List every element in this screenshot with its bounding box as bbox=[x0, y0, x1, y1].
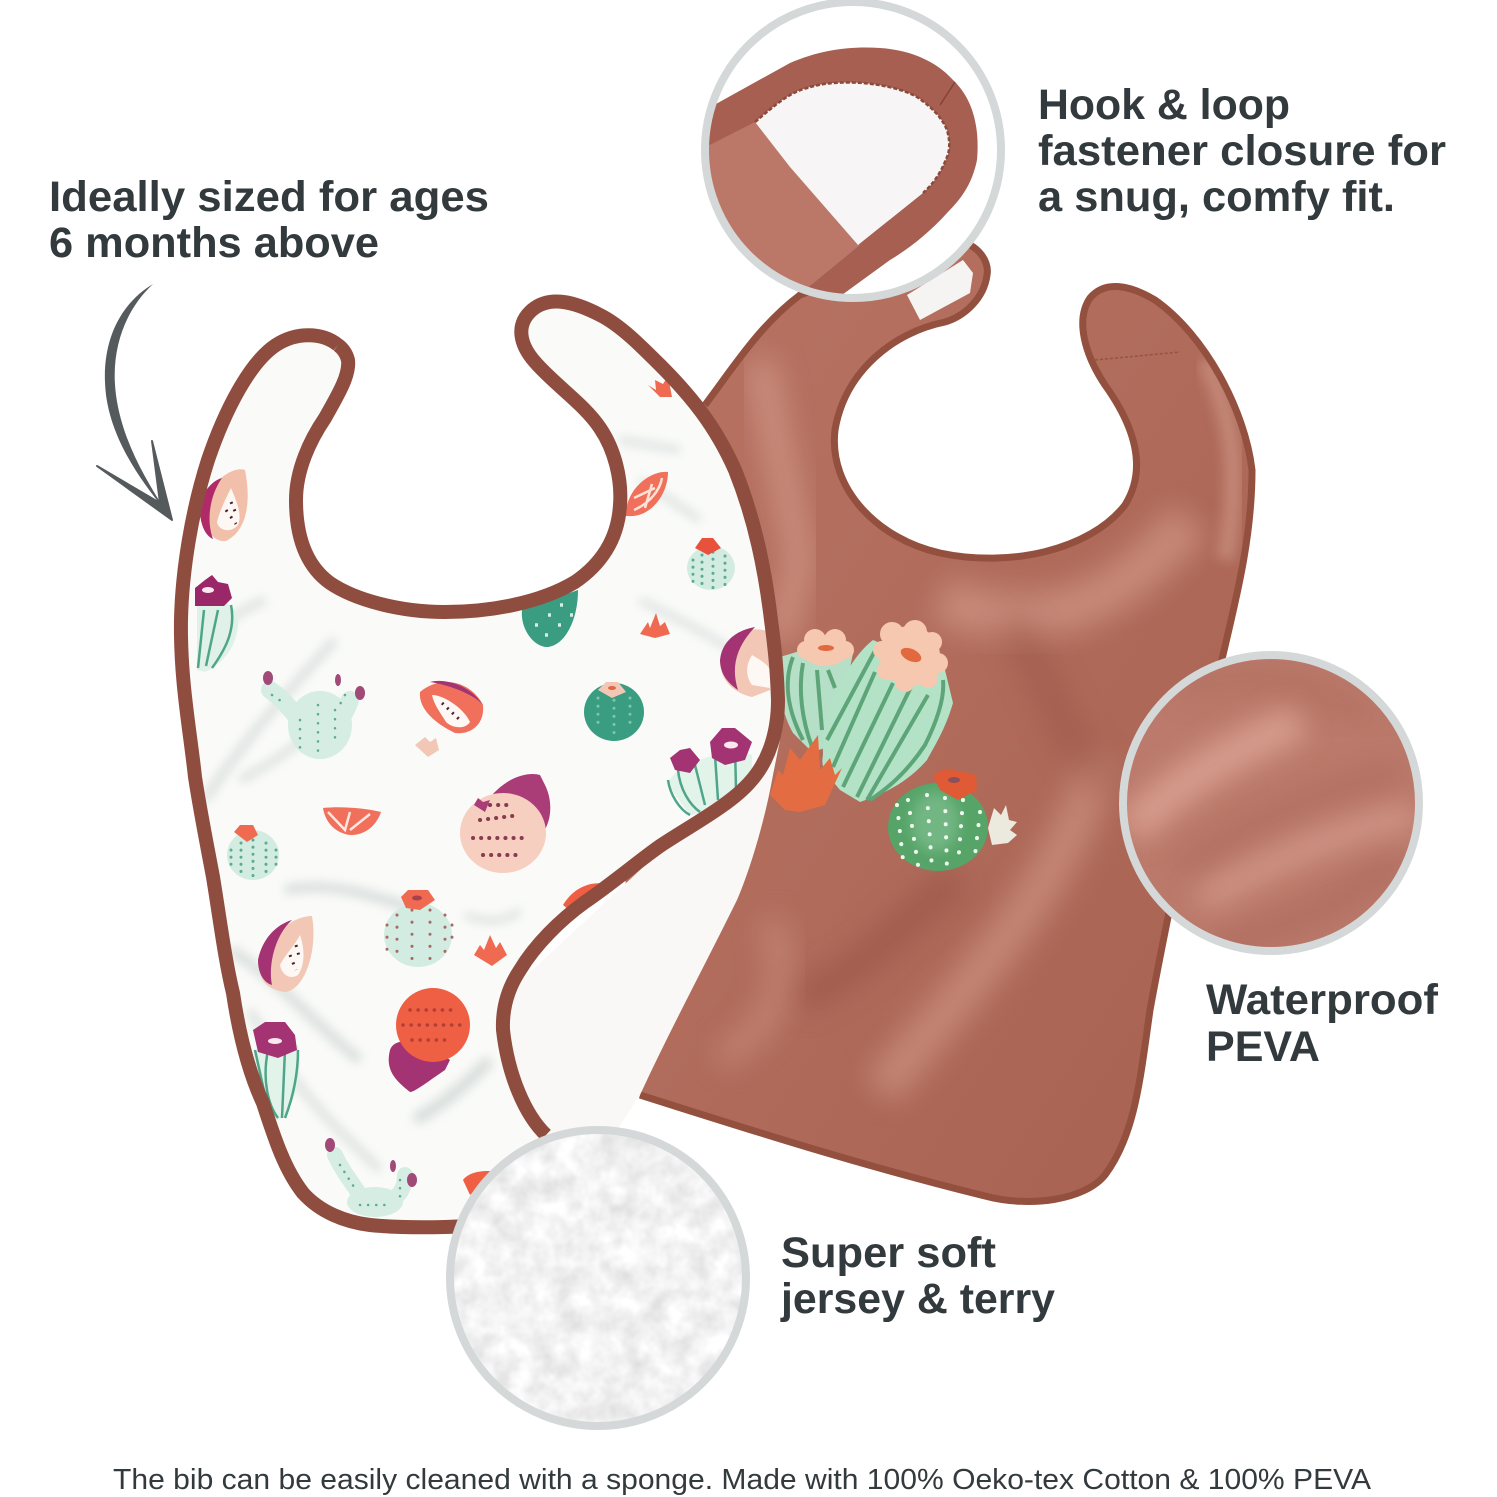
footer note: The bib can be easily cleaned with a sponge. Made with 100% Oeko-tex Cotton & 100% PEVA bbox=[113, 1464, 1372, 1496]
text: terry callout: Super soft bbox=[781, 1229, 996, 1277]
pattern: sprig bbox=[640, 613, 670, 638]
text: fastener callout: fastener closure for bbox=[1038, 127, 1446, 175]
pattern: papaya right edge bbox=[720, 627, 770, 697]
text: waterproof callout bbox=[1206, 976, 1439, 1071]
cactus illustration on right bib bbox=[770, 620, 1017, 871]
pattern: pale teal cactus bottom bbox=[325, 1138, 417, 1217]
bib binding bbox=[181, 302, 778, 1227]
pattern: striped cactus bottom left bbox=[253, 1022, 300, 1120]
terry towel flap bbox=[500, 740, 780, 1170]
arrow pointing to bib bbox=[97, 284, 172, 520]
text: age callout: 6 months above bbox=[49, 219, 379, 267]
text: fastener callout: a snug, comfy fit. bbox=[1038, 173, 1395, 221]
text: age callout bbox=[49, 173, 489, 267]
small flower bbox=[797, 629, 854, 666]
pattern: pale cactus lower left bbox=[227, 825, 279, 880]
white fastener tab on strap bbox=[907, 260, 973, 320]
text: fastener callout bbox=[1038, 81, 1446, 221]
velcro patch bbox=[755, 83, 949, 245]
text: waterproof callout: Waterproof bbox=[1206, 976, 1439, 1024]
text: fastener callout: Hook & loop bbox=[1038, 81, 1290, 129]
orange sprig bbox=[770, 735, 842, 812]
pattern: dotted cactus centre-left bbox=[263, 671, 365, 759]
pattern: flame sprig lower bbox=[474, 935, 507, 966]
pattern: green cactus below neck bbox=[522, 590, 578, 647]
text: terry callout bbox=[780, 1229, 1055, 1323]
pattern: grapefruit slice bbox=[626, 472, 668, 516]
pattern: green barrel cactus bbox=[584, 682, 644, 741]
callout circle: terry close-up bbox=[450, 1130, 746, 1426]
callout circle: hook and loop close-up bbox=[700, 2, 1001, 300]
strap body bbox=[700, 122, 860, 290]
strap binding bbox=[700, 48, 978, 300]
pattern: striped cactus right bbox=[668, 728, 752, 815]
left bib: printed cotton jersey side bbox=[170, 280, 790, 1240]
pattern: dotted pale cactus top right bbox=[687, 538, 735, 590]
big flower bbox=[873, 620, 948, 692]
right bib binding bbox=[640, 240, 1252, 1201]
pattern: fruit near bottom circle bbox=[463, 1171, 490, 1195]
pattern: papaya centre bbox=[420, 681, 483, 733]
callout circle: PEVA close-up bbox=[1123, 655, 1419, 951]
pattern: tiny flower bbox=[415, 737, 439, 757]
text: terry callout: jersey & terry bbox=[780, 1275, 1055, 1323]
pattern: fruit at fold bbox=[563, 883, 600, 908]
text: age callout: Ideally sized for ages bbox=[49, 173, 489, 221]
pattern: dotted pale cactus centre bbox=[384, 890, 452, 967]
fabric shadows bbox=[205, 440, 760, 1170]
pattern: grapefruit wedge bbox=[323, 807, 381, 835]
pattern: pomegranate bbox=[460, 774, 550, 873]
text: waterproof callout: PEVA bbox=[1206, 1023, 1320, 1071]
green ball cactus bbox=[888, 783, 988, 871]
pattern: striped cactus left edge bbox=[195, 575, 238, 672]
pattern: papaya top left bbox=[200, 469, 248, 541]
pattern: red pomegranate bbox=[389, 988, 470, 1092]
pattern: papaya lower left bbox=[258, 916, 313, 992]
pattern: sprig top bbox=[648, 380, 672, 397]
right bib: waterproof PEVA side bbox=[620, 240, 1252, 1201]
